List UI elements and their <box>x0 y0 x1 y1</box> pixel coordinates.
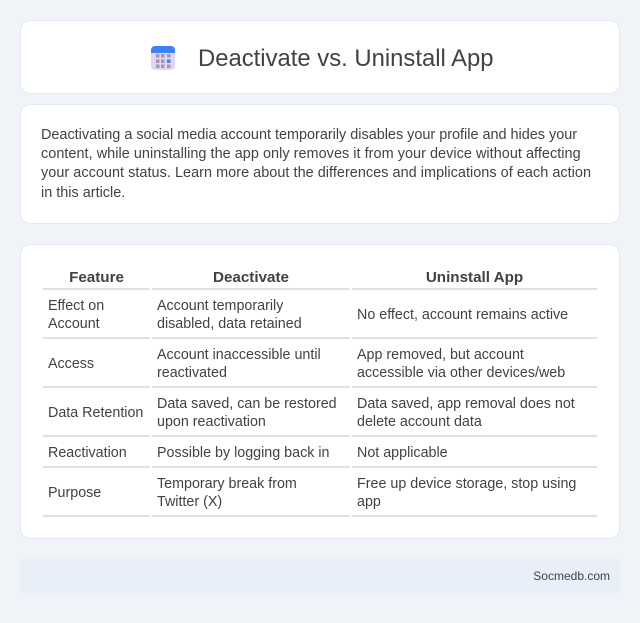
panel: comparison table <box>20 244 620 539</box>
intro text: in this article. <box>41 185 125 201</box>
intro text: your account status. Learn more about the differences and implications of each action <box>41 165 591 181</box>
row: effect on account: Account temporarily <box>157 298 283 314</box>
table header row: Uninstall App <box>426 269 523 286</box>
row: data retention: Data saved, can be restored <box>157 396 337 412</box>
row: access: reactivated <box>157 365 227 381</box>
row: access <box>43 347 597 388</box>
row: purpose: app <box>357 494 381 510</box>
row: access: App removed, but account <box>357 347 524 363</box>
row: effect on account: Account <box>48 316 100 332</box>
row: data retention: upon reactivation <box>157 414 266 430</box>
footer source text: Socmedb.com <box>533 569 610 583</box>
row: purpose: Twitter (X) <box>157 494 222 510</box>
panel: header <box>20 20 620 94</box>
title: Deactivate vs. Uninstall App <box>198 45 494 72</box>
intro text <box>41 127 591 201</box>
row: purpose: Temporary break from <box>157 476 297 492</box>
icon: calendar <box>151 46 175 70</box>
panel: introduction <box>20 104 620 224</box>
table header row: Feature <box>69 269 124 286</box>
row: reactivation: Not applicable <box>357 445 448 461</box>
row: reactivation <box>43 445 597 468</box>
intro text: content, while uninstalling the app only removes it from your device without affecting <box>41 146 581 162</box>
row: data retention: Data Retention <box>48 405 143 421</box>
table header row <box>43 269 597 290</box>
row: effect on account: No effect, account remains active <box>357 307 568 323</box>
intro text: Deactivating a social media account temporarily disables your profile and hides your <box>41 127 577 143</box>
row: effect on account: Effect on <box>48 298 104 314</box>
row: data retention <box>43 396 597 437</box>
row: access: Account inaccessible until <box>157 347 321 363</box>
row: access: Access <box>48 356 94 372</box>
row: reactivation: Possible by logging back in <box>157 445 329 461</box>
table header row: Deactivate <box>213 269 289 286</box>
footer bar <box>20 559 620 593</box>
row: effect on account: disabled, data retained <box>157 316 302 332</box>
row: reactivation: Reactivation <box>48 445 127 461</box>
row: data retention: Data saved, app removal does not <box>357 396 575 412</box>
row: data retention: delete account data <box>357 414 482 430</box>
row: purpose: Free up device storage, stop using <box>357 476 576 492</box>
row: effect on account <box>43 298 597 339</box>
row: access: accessible via other devices/web <box>357 365 565 381</box>
row: purpose: Purpose <box>48 485 101 501</box>
